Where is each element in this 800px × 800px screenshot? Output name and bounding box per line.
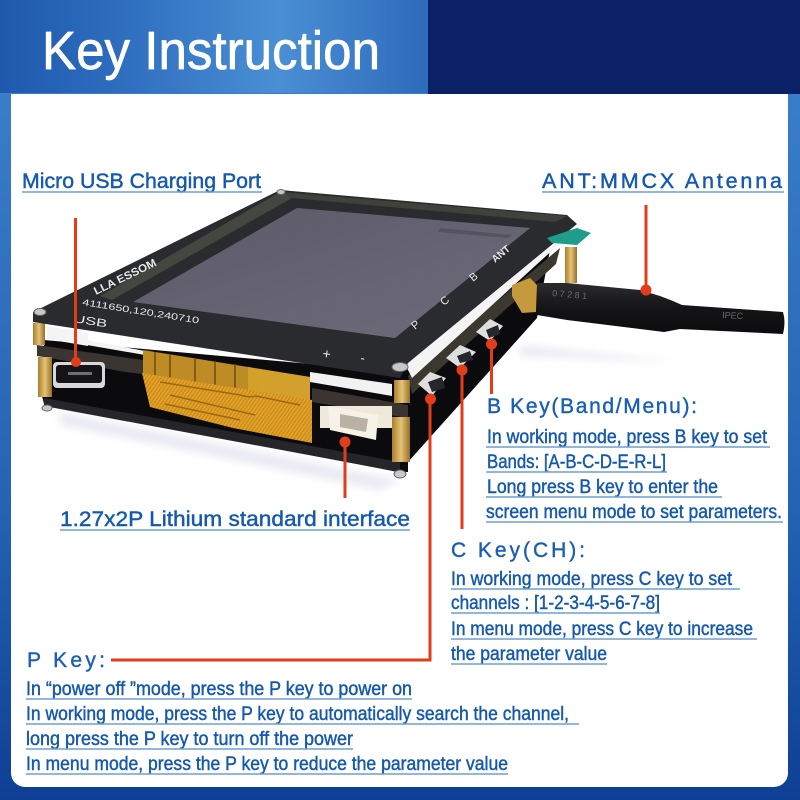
- B key text block: Long press B key to enter the: [487, 476, 718, 498]
- C key text block: channels : [1-2-3-4-5-6-7-8]: [451, 592, 660, 614]
- side keys: [418, 319, 503, 396]
- P key text block: [26, 649, 579, 775]
- P key text block: In working mode, press the P key to automatically search the channel,: [26, 703, 569, 725]
- bezel highlights: [100, 192, 292, 300]
- device photo illustration: USB: [73, 313, 108, 330]
- white strips: [47, 326, 88, 346]
- B key leader: [486, 338, 497, 394]
- C key text block: [451, 539, 757, 665]
- device photo illustration: -: [360, 350, 366, 366]
- green tab: [547, 228, 591, 245]
- flex cable hatched: [142, 373, 312, 443]
- callout: antenna: [542, 169, 784, 296]
- brass standoffs: [33, 247, 577, 462]
- P key text block: long press the P key to turn off the power: [26, 728, 353, 750]
- header banner: [0, 0, 800, 94]
- dark middle band right: [312, 388, 408, 418]
- device photo illustration: 0 7 2 8 1: [552, 288, 588, 301]
- lower PCB: [42, 250, 550, 472]
- C key text block: In menu mode, press C key to increase: [451, 618, 753, 640]
- C key text block: the parameter value: [451, 643, 607, 665]
- device photo illustration: IPEC: [722, 310, 744, 321]
- P key text block: In menu mode, press the P key to reduce the parameter value: [26, 753, 508, 775]
- shadow: [60, 345, 680, 490]
- callout: antenna: ANT:MMCX Antenna: [542, 169, 782, 193]
- device photo illustration: LLA ESSOM: [92, 257, 158, 298]
- B key text block: In working mode, press B key to set: [487, 426, 768, 448]
- C key text block: C Key(CH):: [451, 539, 585, 562]
- callout: micro USB charging port: [22, 169, 262, 367]
- dark middle band left: [37, 345, 143, 374]
- B key text block: [486, 395, 783, 523]
- P key text block: P Key:: [27, 649, 105, 672]
- panel labels: 4111650,120,240710: [82, 297, 200, 325]
- battery connector: [320, 406, 392, 440]
- callout: lithium interface: 1.27x2P Lithium standard interface: [60, 507, 410, 531]
- antenna cable: [537, 283, 784, 334]
- device photo illustration: B: [467, 270, 481, 284]
- B key text block: B Key(Band/Menu):: [487, 395, 697, 418]
- flex cable gold roll: [143, 350, 310, 400]
- device photo illustration: ANT: [490, 244, 513, 265]
- P key leader: [111, 394, 436, 660]
- top panel: [33, 190, 577, 378]
- side board edge: [408, 248, 560, 394]
- C key leader: [456, 364, 468, 529]
- callout: lithium interface: [60, 436, 410, 531]
- B key text block: Bands: [A-B-C-D-E-R-L]: [487, 451, 666, 473]
- P key text block: In “power off ”mode, press the P key to power on: [26, 678, 412, 700]
- C key text block: In working mode, press C key to set: [451, 568, 733, 590]
- device photo illustration: C: [438, 294, 452, 308]
- device photo illustration: +: [322, 345, 332, 362]
- device photo illustration: [33, 190, 784, 490]
- micro USB port: [53, 362, 105, 388]
- callout: micro USB charging port: Micro USB Charging Port: [22, 169, 261, 193]
- title: Key Instruction: [42, 21, 380, 81]
- device photo illustration: P: [409, 318, 423, 332]
- brass connector: [512, 278, 537, 313]
- screen: [133, 208, 530, 338]
- screws: [34, 190, 408, 478]
